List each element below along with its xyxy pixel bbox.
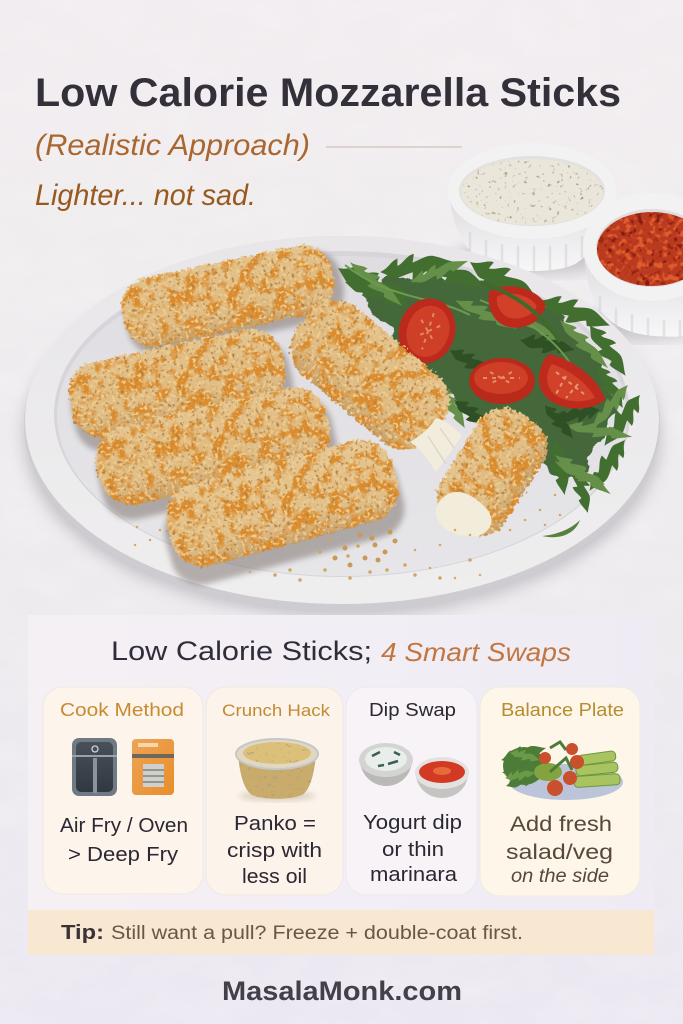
icon: air fryers <box>72 738 174 796</box>
card text <box>60 815 188 866</box>
scattered crumbs <box>135 495 560 580</box>
card text: Yogurt dip <box>363 812 462 834</box>
card: dip swap <box>346 687 477 895</box>
panel heading: 4 Smart Swaps <box>381 637 571 667</box>
footer website: MasalaMonk.com <box>222 976 462 1006</box>
tomato 2 <box>482 280 548 335</box>
mozzarella sticks <box>62 240 559 591</box>
panel heading: Low Calorie Sticks; <box>111 636 372 666</box>
card text: Air Fry / Oven <box>60 815 188 837</box>
card text <box>363 812 462 886</box>
icon: white dip ramekin <box>448 143 616 274</box>
card: cook method: Cook Method <box>60 700 184 720</box>
card: crunch hack: Crunch Hack <box>222 701 331 720</box>
stick 1 <box>116 240 340 352</box>
card text: salad/veg <box>506 841 613 864</box>
card text: crisp with <box>227 840 322 862</box>
card text: or thin <box>382 839 444 861</box>
icon: panko tub <box>236 739 318 801</box>
card text: > Deep Fry <box>68 844 178 866</box>
card: dip swap: Dip Swap <box>369 700 456 720</box>
card text: marinara <box>370 864 458 886</box>
stick 3 <box>89 380 337 512</box>
tomato 4 <box>539 354 605 409</box>
card text: less oil <box>242 866 307 888</box>
card text: on the side <box>511 866 609 887</box>
tomato 3 <box>469 358 535 404</box>
swaps panel <box>28 615 654 955</box>
card text: Add fresh <box>510 813 612 836</box>
stick 6 <box>425 397 559 547</box>
tagline: Lighter... not sad. <box>35 179 256 212</box>
tip bar: Tip: <box>61 922 104 944</box>
card text <box>506 813 613 887</box>
stick 2 <box>62 323 292 443</box>
card: balance plate <box>480 687 640 896</box>
tip bar: Still want a pull? Freeze + double-coat first. <box>111 923 523 944</box>
tip bar <box>28 910 654 955</box>
card: balance plate: Balance Plate <box>501 700 624 720</box>
card: cook method <box>43 687 203 894</box>
cheese pull <box>410 418 462 472</box>
card: crunch hack <box>206 687 343 895</box>
panel heading <box>111 636 571 667</box>
card text <box>227 813 322 888</box>
cheese end <box>436 492 491 536</box>
subtitle: (Realistic Approach) <box>35 129 310 162</box>
stick 5 <box>276 287 464 463</box>
card text: Panko = <box>234 813 316 835</box>
icon: red salsa ramekin <box>582 193 683 339</box>
icon: dip bowls <box>359 743 469 798</box>
cherry tomatoes <box>390 280 605 409</box>
icon: salad plate <box>499 740 623 800</box>
stick 4 <box>158 432 406 574</box>
plate <box>24 236 660 616</box>
tomato 1 <box>390 291 464 371</box>
salad greens <box>332 249 649 537</box>
main title: Low Calorie Mozzarella Sticks <box>35 71 621 115</box>
